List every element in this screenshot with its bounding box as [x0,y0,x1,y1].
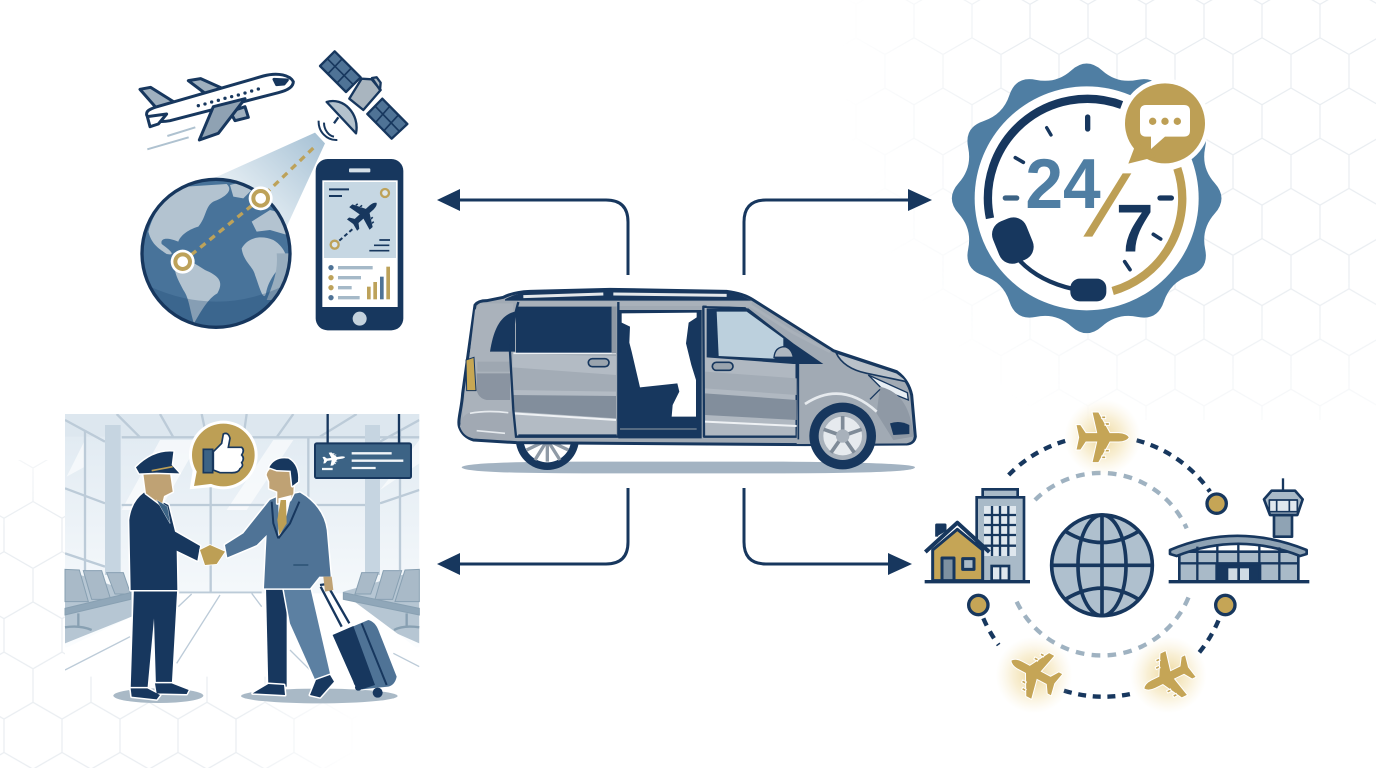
route marker: destination [249,186,273,210]
tracking beam [213,133,325,227]
seats right [343,569,419,630]
headset [988,213,1106,301]
terminal background [65,414,419,677]
icon: satellite [319,51,407,140]
chat speech bubble [1120,79,1210,168]
icon: globe with route [142,179,297,327]
gold plane: bottom right [1130,637,1207,713]
floor shadows [113,688,398,703]
speech bubble: thumbs up [189,421,258,489]
rear section [460,303,515,440]
icon: smartphone [316,159,403,330]
clock ring navy [988,99,1122,218]
route marker: origin [171,250,195,274]
text: 24: 24 [1025,144,1101,223]
flight sign [315,414,411,478]
open doorway with seats [618,310,702,438]
slash [1083,173,1131,237]
icon: building [977,489,1024,581]
white clock face [975,86,1199,310]
person: chauffeur [129,452,200,699]
ground shadow [462,462,915,473]
gold plane: top [1064,399,1141,476]
panel: flight tracking illustration [140,51,407,330]
seats left [65,569,131,630]
route nodes [969,494,1235,615]
rear wheel [516,444,578,470]
panel: door-to-airport route diagram [925,399,1309,713]
panel: van [459,289,915,473]
roof band and rails [505,290,752,306]
icon: world globe [1052,515,1152,616]
clock tick marks [1005,117,1171,270]
arrow: van to flight tracking [437,189,628,275]
clock ring gold [1113,168,1182,291]
icon: airplane [140,74,293,140]
arrow: van to 24/7 support [744,189,932,275]
speed lines [147,127,195,149]
arrow: van to door-to-airport routes [744,488,912,575]
text: 7: 7 [1116,191,1153,266]
ground line: airport [1169,577,1309,587]
inner dashed ring [1017,473,1191,655]
background hexagon pattern: top right [912,0,1376,407]
icon: control tower [1264,478,1303,537]
panel: 24/7 support badge [952,63,1221,333]
background hexagon pattern: bottom left [0,460,314,768]
front fender and hood [797,353,913,444]
icon: airport terminal [1170,536,1307,581]
handshake [200,545,225,565]
suitcase [320,577,397,698]
panel: meet and greet at airport [65,414,419,703]
gold plane: bottom left [996,637,1072,713]
ground line: city [925,577,1030,587]
route dashed line [182,147,314,263]
outer dashed route [983,440,1220,697]
front door [703,305,830,437]
sliding door [510,302,618,437]
icon: house [925,523,989,581]
van body [459,289,915,445]
arrow: van to meet and greet [437,488,628,575]
person: passenger [225,458,334,697]
scalloped badge [952,63,1221,333]
front wheel [809,403,876,469]
